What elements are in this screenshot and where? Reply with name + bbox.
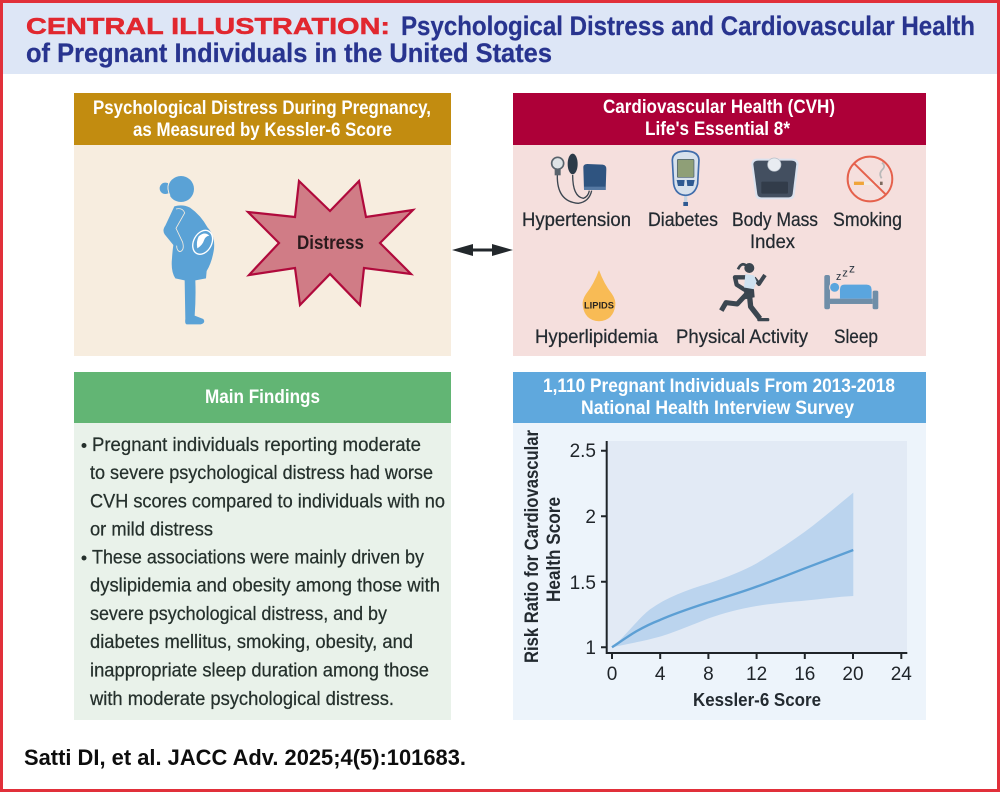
y axis title: Risk Ratio for Cardiovascular — [522, 429, 543, 663]
text block: finding 1: CVH scores compared to individuals with no — [90, 490, 445, 512]
text block: finding 2: dyslipidemia and obesity among those with — [90, 574, 440, 596]
text block: finding 2: inappropriate sleep duration among those — [90, 660, 429, 682]
y axis title: Health Score — [544, 497, 565, 602]
label: body mass index: Index — [750, 231, 795, 253]
icon: sleep bed: z — [842, 268, 848, 280]
x tick labels: 20 — [842, 664, 864, 685]
arrow: bidirectional association — [452, 244, 513, 256]
x tick labels: 8 — [703, 664, 714, 685]
title band — [3, 3, 997, 74]
icon: lipids drop: LIPIDS — [584, 301, 614, 311]
heading: cardiovascular health: Cardiovascular Health (CVH) — [603, 96, 835, 118]
citation: Satti DI, et al. JACC Adv. 2025;4(5):101683. — [24, 745, 466, 770]
icon: distress starburst: Distress — [297, 233, 364, 254]
heading: cardiovascular health — [513, 93, 926, 145]
icon: pregnant person — [160, 176, 217, 324]
heading: main findings — [74, 372, 451, 423]
y tick labels: 2.5 — [570, 441, 596, 462]
text block: finding 1: or mild distress — [90, 518, 213, 540]
text block: finding 1: to severe psychological distress had worse — [90, 462, 433, 484]
heading: survey — [513, 372, 926, 423]
icon: sleep bed — [824, 262, 878, 309]
line chart: risk ratio by Kessler-6 score — [522, 429, 912, 710]
x tick labels: 16 — [794, 664, 815, 685]
x tick labels: 0 — [607, 664, 617, 685]
heading: psychological distress — [74, 93, 451, 145]
confidence band — [612, 493, 853, 647]
panel: main findings — [74, 372, 451, 720]
heading: survey: National Health Interview Survey — [581, 397, 854, 419]
title label: CENTRAL ILLUSTRATION: — [26, 13, 390, 39]
text block: finding 1 — [82, 434, 445, 540]
text block: finding 2 — [82, 546, 440, 710]
label: hypertension: Hypertension — [522, 209, 631, 231]
y axis title — [522, 429, 565, 663]
x tick labels: 12 — [746, 664, 767, 685]
text block: finding 2: diabetes mellitus, smoking, obesity, and — [90, 631, 413, 653]
icon: sleep bed: z — [836, 271, 841, 283]
title line 2: of Pregnant Individuals in the United States — [26, 38, 552, 68]
icon: lipids drop — [583, 270, 615, 321]
icon: sleep bed: z — [849, 262, 855, 276]
heading: survey: 1,110 Pregnant Individuals From 2013-2018 — [543, 375, 895, 397]
x axis title: Kessler-6 Score — [693, 689, 821, 710]
icon: blood pressure cuff — [552, 154, 606, 203]
text block: finding 2: with moderate psychological distress. — [89, 688, 394, 710]
icon: weight scale — [751, 158, 799, 199]
heading: cardiovascular health: Life's Essential 8* — [645, 118, 790, 140]
y tick labels: 1 — [585, 638, 596, 659]
icon: no smoking — [848, 157, 892, 201]
text block: finding 1: Pregnant individuals reporting moderate — [92, 434, 421, 456]
text block: finding 2: severe psychological distress, and by — [90, 603, 387, 625]
heading: psychological distress: as Measured by Kessler-6 Score — [133, 119, 392, 141]
x tick labels — [607, 664, 912, 685]
x tick labels: 24 — [891, 664, 912, 685]
heading: psychological distress: Psychological Distress During Pregnancy, — [93, 97, 431, 119]
panel: survey chart — [513, 372, 926, 720]
label: physical activity: Physical Activity — [676, 326, 808, 348]
panel: cardiovascular health — [513, 93, 926, 356]
icon: distress starburst — [248, 181, 413, 305]
x tick labels: 4 — [655, 664, 666, 685]
panel: psychological distress — [74, 93, 451, 356]
y tick labels — [570, 441, 596, 659]
text block: finding 2: These associations were mainly driven by — [92, 546, 424, 568]
label: body mass index — [732, 209, 818, 253]
y tick labels: 1.5 — [570, 573, 596, 594]
icon: runner — [721, 263, 769, 321]
axes — [601, 441, 907, 659]
icon: glucometer — [672, 151, 699, 206]
label: body mass index: Body Mass — [732, 209, 818, 231]
label: sleep: Sleep — [834, 326, 878, 348]
y tick labels: 2 — [585, 507, 596, 528]
trend line — [612, 550, 853, 647]
label: diabetes: Diabetes — [648, 209, 718, 231]
label: hyperlipidemia: Hyperlipidemia — [535, 326, 658, 348]
heading: main findings: Main Findings — [205, 386, 320, 408]
label: smoking: Smoking — [833, 209, 902, 231]
